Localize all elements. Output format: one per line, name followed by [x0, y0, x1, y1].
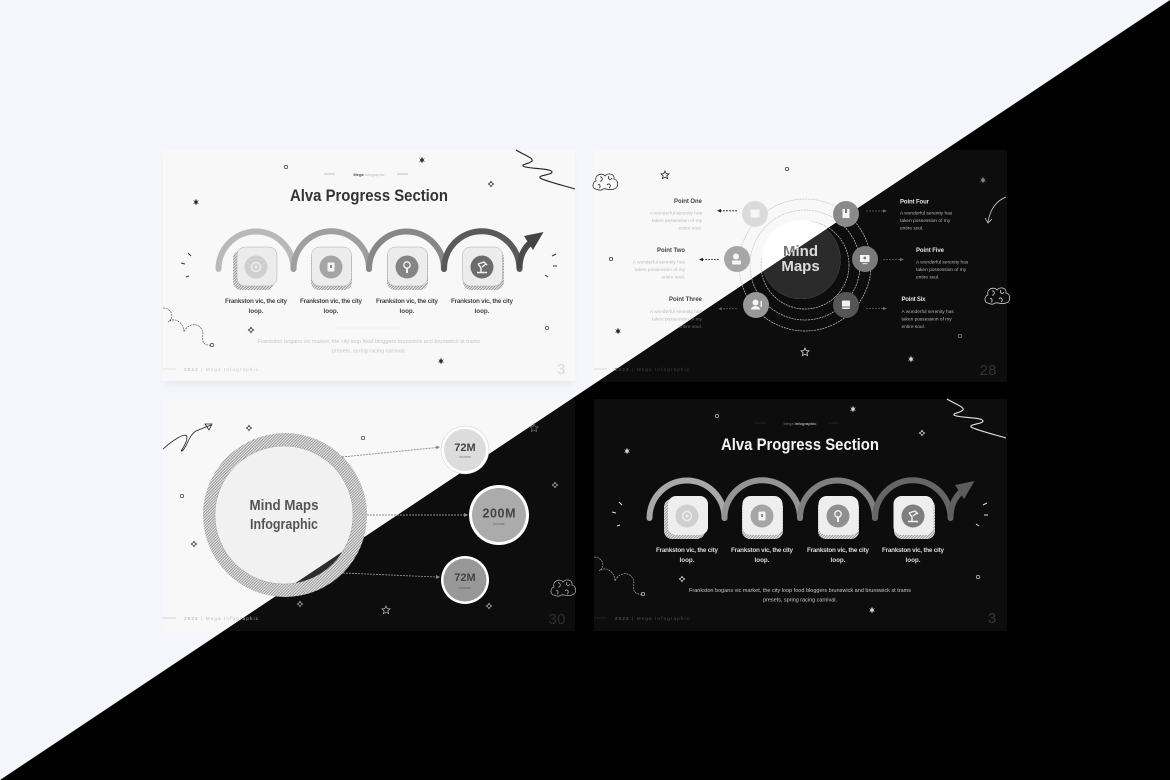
point six: [902, 297, 954, 330]
point five: entire soul.: [916, 274, 939, 280]
point five: Point Five: [916, 248, 945, 254]
slide: Mind Maps circular diagram (split light / dark): [593, 150, 1010, 382]
value: 72M top: Income: [459, 455, 471, 459]
big circle: [203, 433, 367, 597]
point two: A wonderful serenity has: [633, 260, 686, 266]
body text: presets, spring racing carnival.: [332, 348, 406, 354]
body text: [258, 328, 480, 354]
footer: 2023 | Mega Infographic: [184, 367, 259, 372]
step card 4: Frankston vic, the city: [882, 547, 944, 554]
step card 2: [731, 496, 793, 564]
center disc: [762, 220, 840, 299]
point four: A wonderful serenity has: [900, 210, 953, 216]
body text: presets, spring racing carnival.: [763, 598, 837, 604]
progress arcs with arrow: [650, 480, 974, 518]
point one: [650, 199, 703, 232]
slide: Alva Progress Section (light): [163, 150, 575, 384]
value: 72M top: [441, 426, 489, 474]
header label: Mega Infographic: [784, 421, 817, 426]
point five: taken possession of my: [916, 267, 967, 273]
point six: Point Six: [902, 297, 926, 303]
center title: Maps: [781, 258, 820, 275]
step card 2: Frankston vic, the city: [300, 298, 362, 305]
step card 3: Frankston vic, the city: [376, 298, 438, 305]
step card 2: loop.: [754, 557, 770, 564]
value: 200M: [469, 485, 529, 545]
point three: A wonderful serenity has: [650, 309, 703, 315]
step card 4: Frankston vic, the city: [451, 298, 513, 305]
center title: Mind: [783, 243, 818, 260]
value: 72M bottom: 72M: [454, 572, 476, 584]
page number: 28: [980, 362, 996, 379]
value: 72M bottom: Income: [459, 586, 471, 590]
header label: [324, 172, 408, 177]
node: top right: [833, 201, 859, 227]
point three: A wonderful serenity has: [650, 309, 703, 315]
step card 4: loop.: [905, 557, 921, 564]
value: 200M: 200M: [482, 506, 516, 520]
step card 2: loop.: [323, 308, 339, 315]
dashed rings: [739, 199, 871, 331]
step card 3: loop.: [830, 557, 846, 564]
step card 4: [882, 496, 944, 564]
title: Alva Progress Section: [721, 435, 879, 454]
value: 72M bottom: [441, 556, 489, 604]
point two: entire soul.: [662, 274, 685, 280]
big circle title: Mind Maps: [250, 497, 318, 514]
point four: taken possession of my: [900, 218, 951, 224]
point five: A wonderful serenity has: [916, 260, 969, 266]
point three: entire soul.: [679, 324, 702, 330]
point three: taken possession of my: [652, 316, 703, 322]
page number: 30: [548, 611, 566, 628]
step card 2: Frankston vic, the city: [731, 547, 793, 554]
point two: Point Two: [657, 248, 685, 254]
step card 1: Frankston vic, the city: [225, 298, 287, 305]
point two: taken possession of my: [635, 267, 686, 273]
doodles: [163, 150, 575, 364]
point four: [900, 200, 953, 232]
point two: [633, 248, 686, 280]
point six: taken possession of my: [902, 316, 952, 322]
step card 3: [376, 247, 438, 315]
doodles: [594, 399, 1006, 613]
node: bottom left: [743, 292, 769, 318]
arrows: left side: [699, 209, 737, 310]
point three: entire soul.: [679, 324, 702, 330]
big circle title: [250, 497, 318, 533]
header label: Mega Infographic: [353, 172, 385, 177]
doodles: [593, 167, 1010, 362]
body text: Frankston bogans vic market, the city loop food bloggers brunswick and brunswick st trams: [258, 339, 480, 345]
step card 1: loop.: [248, 308, 264, 315]
big circle title: Infographic: [250, 516, 318, 533]
slide: Alva Progress Section (dark): [594, 399, 1007, 631]
point one: Point One: [674, 199, 703, 205]
page number: 3: [988, 610, 996, 627]
step card 1: [656, 496, 718, 564]
step card 3: [807, 496, 869, 564]
connector arrows: [342, 446, 468, 579]
center title: Mind: [783, 243, 818, 260]
point four: Point Four: [900, 200, 930, 206]
step card 4: [451, 247, 513, 315]
point four: entire soul.: [900, 226, 923, 232]
node: top left: [742, 201, 768, 227]
point one: taken possession of my: [652, 218, 703, 224]
step card 4: loop.: [474, 308, 490, 315]
value: 200M: Income: [493, 522, 505, 526]
point one: entire soul.: [679, 226, 702, 232]
point six: A wonderful serenity has: [902, 309, 954, 315]
header label: [755, 421, 839, 426]
step card 3: Frankston vic, the city: [807, 547, 869, 554]
step card 1: Frankston vic, the city: [656, 547, 718, 554]
point one: A wonderful serenity has: [650, 210, 703, 216]
body text: [689, 588, 911, 604]
point six: entire soul.: [902, 324, 925, 330]
point three: Point Three: [669, 297, 703, 303]
step card 3: loop.: [399, 308, 415, 315]
value: 72M top: 72M: [454, 442, 476, 454]
doodles: [163, 424, 576, 614]
node: bottom right: [833, 292, 859, 318]
progress arcs with arrow: [218, 231, 544, 269]
step card 1: loop.: [679, 557, 695, 564]
page number: 3: [557, 361, 565, 378]
title: Alva Progress Section: [290, 186, 448, 205]
slide: Mind Maps Infographic with values (split light / dark): [163, 399, 576, 631]
footer: 2023 | Mega Infographic: [615, 616, 690, 621]
body text: Frankston bogans vic market, the city loop food bloggers brunswick and brunswick st trams: [689, 588, 911, 594]
node: middle right: [852, 246, 878, 272]
point three: taken possession of my: [652, 316, 703, 322]
arrows: right side: [866, 209, 904, 310]
point three: [650, 297, 703, 330]
center title: Maps: [781, 258, 820, 275]
step card 1: [225, 247, 287, 315]
point five: [916, 248, 969, 280]
footer: 2023 | Mega Infographic: [615, 367, 690, 372]
footer: 2023 | Mega Infographic: [184, 616, 259, 621]
step card 2: [300, 247, 362, 315]
center title: [782, 245, 820, 274]
node: middle left: [724, 246, 750, 272]
